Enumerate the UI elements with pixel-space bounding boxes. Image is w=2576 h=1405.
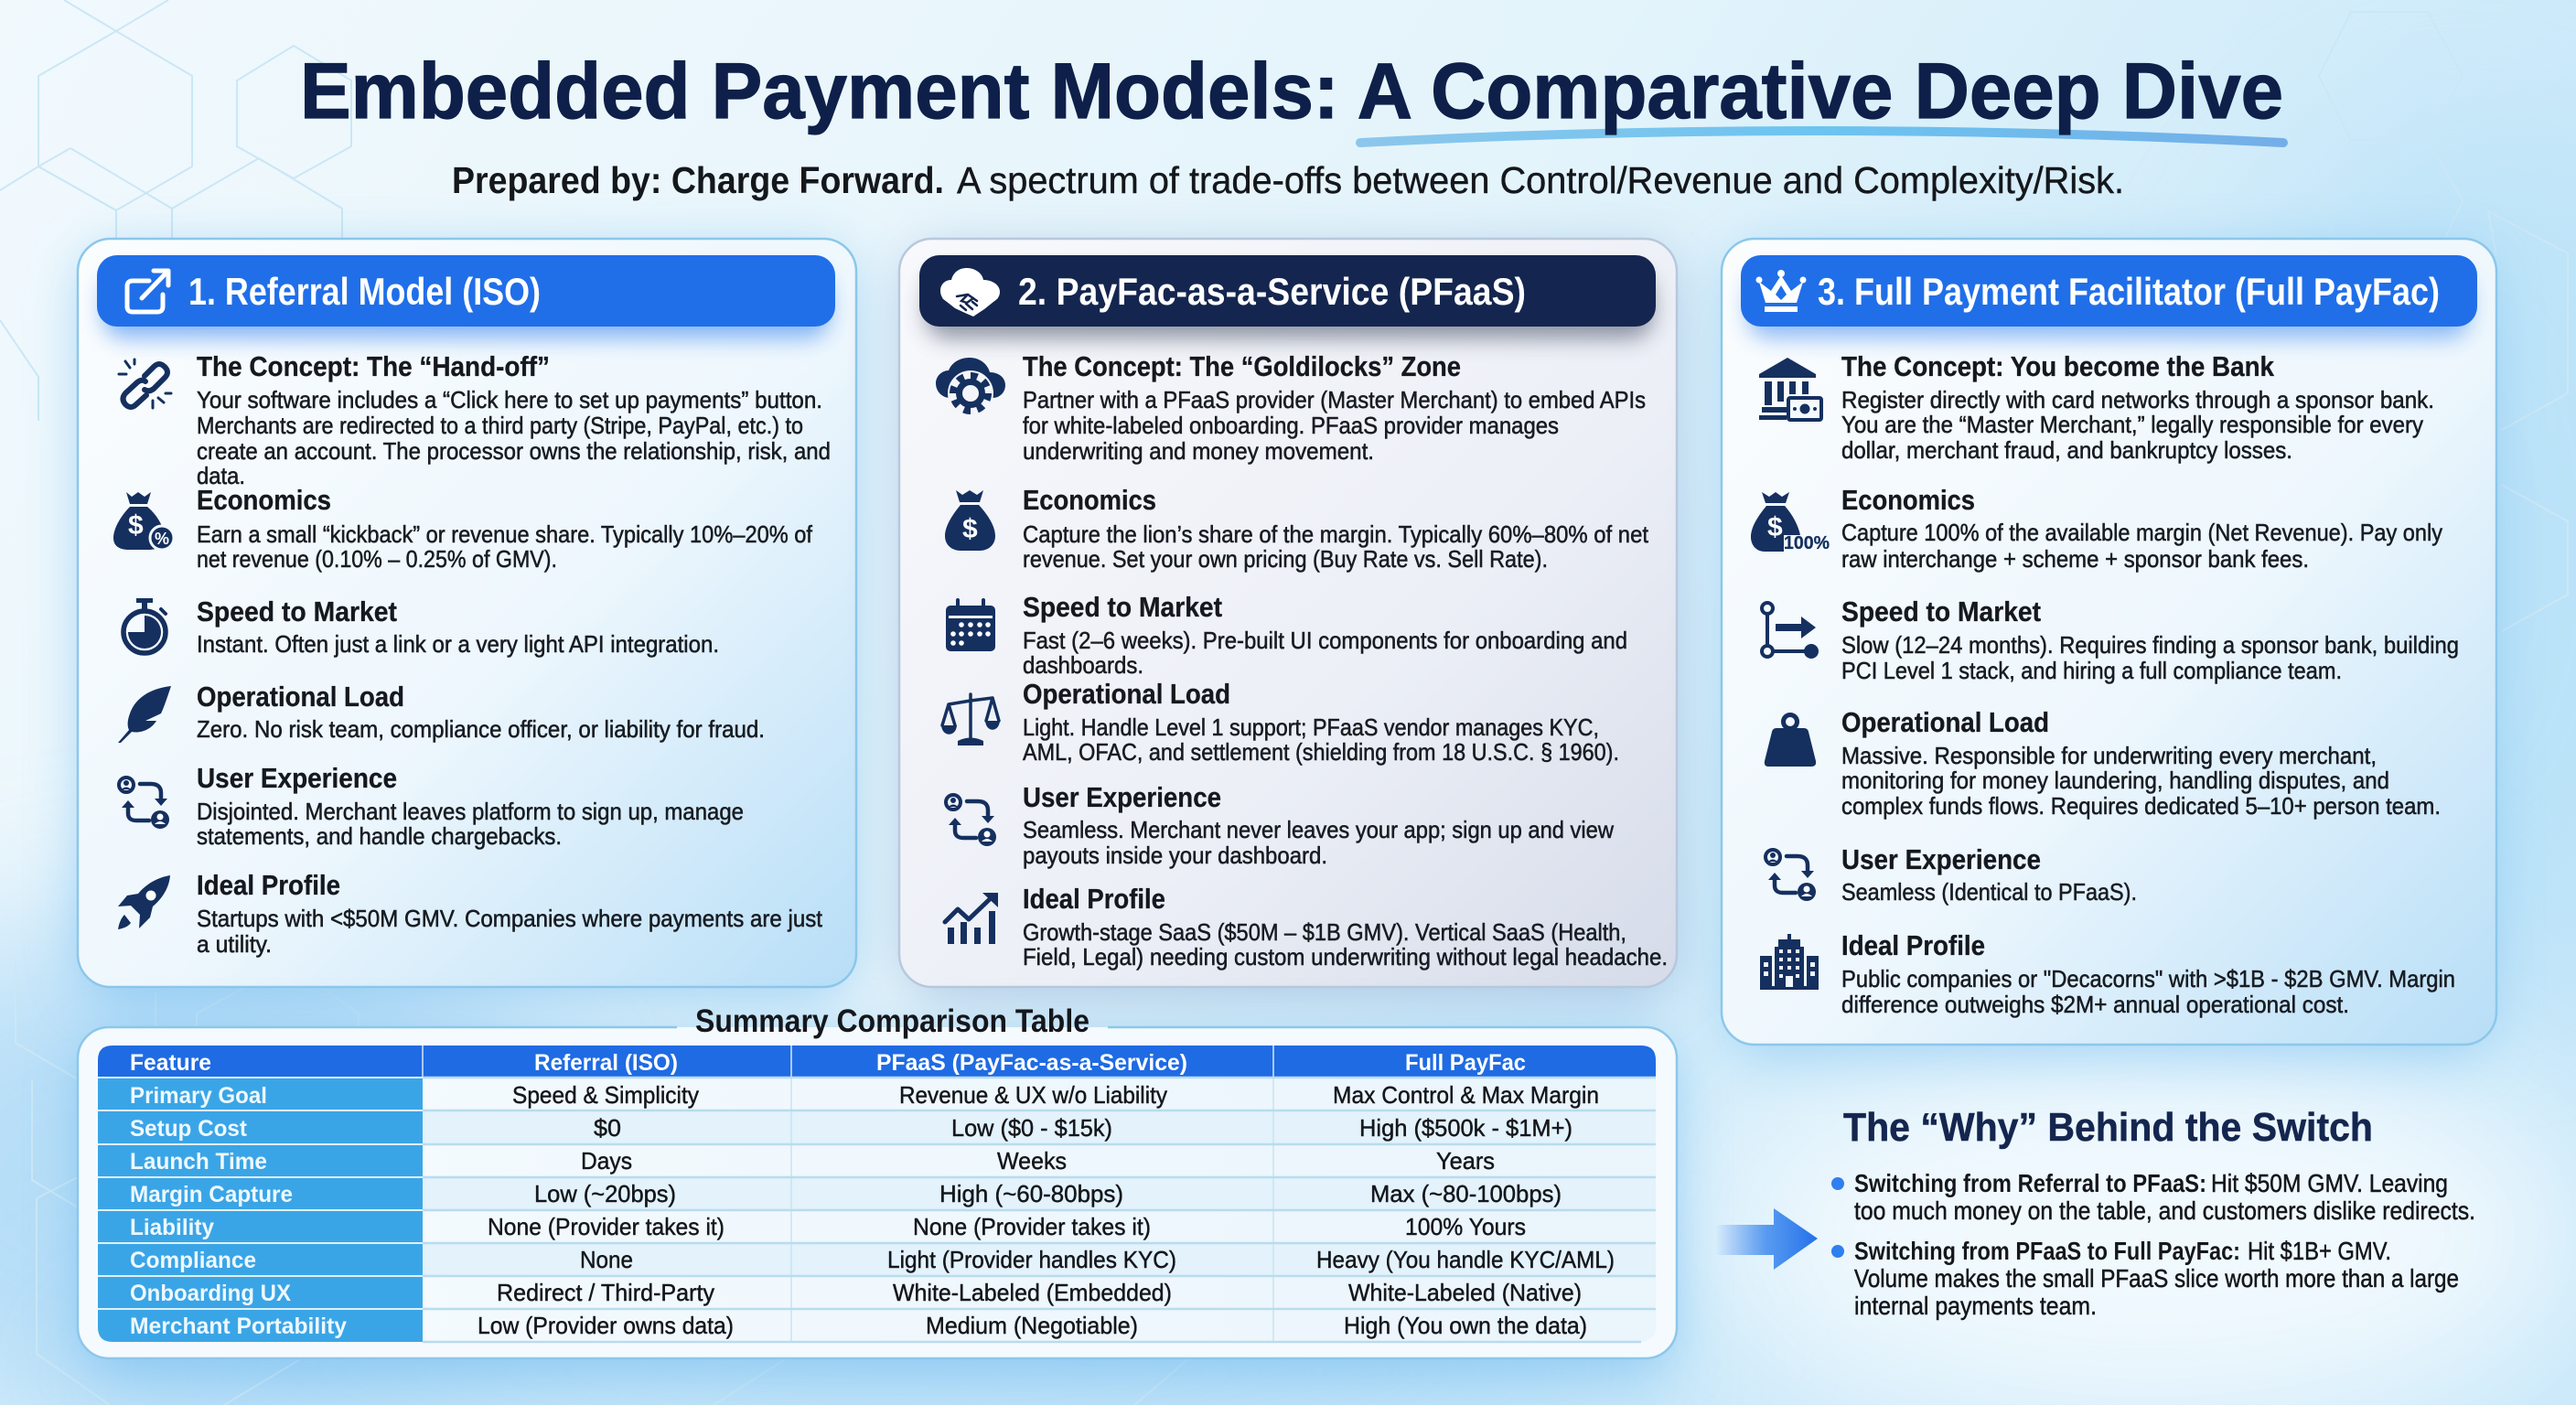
text: speed: Speed to Market <box>197 595 397 627</box>
row: merchant portability: Low (Provider owns data) <box>478 1312 734 1339</box>
text: concept <box>1023 350 1646 465</box>
text: speed: Speed to Market <box>1841 595 2041 627</box>
row: onboarding ux <box>130 1279 1582 1306</box>
icon: growth chart <box>945 893 998 944</box>
icon: external link <box>127 271 168 312</box>
text: operational <box>1841 706 2441 820</box>
bullet: pfaas to full payfac: Hit $1B+ GMV. <box>2248 1237 2391 1265</box>
bullet: referral to pfaas <box>1831 1169 2475 1225</box>
row: launch time: Launch Time <box>130 1149 267 1174</box>
icon: user swap <box>946 795 996 846</box>
text: speed: Speed to Market <box>1023 591 1222 623</box>
text: ideal profile: difference outweighs $2M+ annual operational cost. <box>1841 991 2349 1018</box>
text: user experience: statements, and handle chargebacks. <box>197 822 562 850</box>
text: ideal profile <box>197 869 823 958</box>
row: primary goal: Speed & Simplicity <box>512 1081 699 1109</box>
row: primary goal: Primary Goal <box>130 1083 267 1109</box>
row: compliance: None <box>580 1246 633 1273</box>
text: concept: data. <box>197 462 245 489</box>
text: ideal profile <box>1841 929 2455 1018</box>
text: speed: Slow (12–24 months). Requires finding a sponsor bank, building <box>1841 631 2459 659</box>
text: user experience: User Experience <box>1023 781 1221 813</box>
row: setup cost <box>130 1114 1572 1142</box>
icon: cloud handshake <box>940 268 1000 316</box>
row: onboarding ux: Onboarding UX <box>130 1281 291 1306</box>
row: onboarding ux: Redirect / Third-Party <box>497 1279 714 1306</box>
table header row: PFaaS (PayFac-as-a-Service) <box>876 1050 1187 1076</box>
icon: rocket <box>118 875 170 929</box>
row: liability: None (Provider takes it) <box>488 1213 724 1240</box>
text: user experience: payouts inside your dashboard. <box>1023 842 1327 869</box>
icon: bank <box>1759 358 1821 420</box>
text: ideal profile: Startups with <$50M GMV. Companies where payments are just <box>197 905 823 932</box>
row: margin capture: Margin Capture <box>130 1182 293 1207</box>
text: concept: dollar, merchant fraud, and bankruptcy losses. <box>1841 436 2292 464</box>
row: margin capture <box>130 1180 1562 1207</box>
bullet: referral to pfaas: Switching from Referral to PFaaS: <box>1854 1169 2206 1197</box>
icon: money bag 100 percent <box>1751 492 1830 553</box>
panel: summary comparison table <box>78 1003 1677 1372</box>
text: user experience: User Experience <box>197 762 397 794</box>
icon: money bag: $ <box>962 514 978 544</box>
bullet: pfaas to full payfac <box>1831 1237 2459 1320</box>
row: onboarding ux: White-Labeled (Native) <box>1348 1279 1582 1306</box>
text: speed <box>1023 591 1627 679</box>
text: economics <box>1841 484 2442 573</box>
row: setup cost: High ($500k - $1M+) <box>1359 1114 1572 1142</box>
icon: broken link <box>119 359 171 408</box>
text: operational: Operational Load <box>1841 706 2049 738</box>
icon: weight <box>1765 715 1816 767</box>
text: ideal profile: Public companies or "Decacorns" with >$1B - $2B GMV. Margin <box>1841 965 2455 992</box>
icon: money bag percent: $ <box>128 510 144 541</box>
section: why behind the switch <box>1831 1105 2475 1320</box>
table header row: Full PayFac <box>1405 1050 1526 1076</box>
text: economics: Earn a small “kickback” or revenue share. Typically 10%–20% of <box>197 520 813 548</box>
text: speed: dashboards. <box>1023 651 1143 679</box>
text: concept: Partner with a PFaaS provider (Master Merchant) to embed APIs <box>1023 386 1646 413</box>
row: margin capture: Max (~80-100bps) <box>1370 1180 1562 1207</box>
text: concept: for white-labeled onboarding. PFaaS provider manages <box>1023 412 1559 439</box>
table heading: Summary Comparison Table <box>695 1003 1089 1039</box>
row: merchant portability: Merchant Portability <box>130 1314 347 1339</box>
row: launch time: Years <box>1436 1147 1495 1174</box>
row: margin capture: High (~60-80bps) <box>939 1180 1123 1207</box>
row: margin capture: Low (~20bps) <box>534 1180 676 1207</box>
icon: money bag percent <box>113 492 174 550</box>
row: liability: None (Provider takes it) <box>913 1213 1151 1240</box>
panel header: 2. PayFac-as-a-Service (PFaaS) <box>1018 270 1526 313</box>
text: concept <box>1841 350 2434 464</box>
panel header <box>1741 255 2477 327</box>
bullet: referral to pfaas: Hit $50M GMV. Leaving <box>2211 1169 2448 1197</box>
text: ideal profile: Field, Legal) needing custom underwriting without legal headache. <box>1023 943 1668 971</box>
text: ideal profile <box>1023 883 1668 971</box>
row: liability: 100% Yours <box>1405 1213 1526 1240</box>
icon: user swap <box>119 778 169 829</box>
text: concept: The Concept: The “Hand-off” <box>197 350 550 382</box>
panel header: 1. Referral Model (ISO) <box>188 270 541 313</box>
row: merchant portability: High (You own the data) <box>1344 1312 1587 1339</box>
panel: 2. PayFac-as-a-Service <box>899 239 1677 997</box>
text: economics <box>197 484 813 573</box>
row: launch time <box>130 1147 1495 1174</box>
icon: money bag 100 percent: $ <box>1767 512 1783 542</box>
text: economics: Economics <box>1023 484 1156 516</box>
text: operational: monitoring for money laundering, handling disputes, and <box>1841 767 2389 794</box>
text: operational: Operational Load <box>197 681 404 713</box>
text: speed: PCI Level 1 stack, and hiring a full compliance team. <box>1841 657 2342 684</box>
icon: long path <box>1762 603 1819 659</box>
icon: user swap <box>1766 850 1816 901</box>
subtitle <box>452 159 2124 201</box>
icon: money bag <box>945 490 995 551</box>
comparison table <box>98 1046 1656 1342</box>
icon: money bag 100 percent: 100% <box>1784 533 1830 553</box>
text: ideal profile: Ideal Profile <box>197 869 340 901</box>
text: concept: You are the “Master Merchant,” legally responsible for every <box>1841 411 2423 438</box>
text: ideal profile: Growth-stage SaaS ($50M – $1B GMV). Vertical SaaS (Health, <box>1023 918 1626 946</box>
text: economics: Economics <box>197 484 331 516</box>
icon: calendar <box>946 600 995 651</box>
text: operational <box>1023 678 1619 766</box>
row: compliance: Heavy (You handle KYC/AML) <box>1316 1246 1615 1273</box>
title underline <box>1360 131 2283 143</box>
text: economics: Capture 100% of the available margin (Net Revenue). Pay only <box>1841 519 2442 546</box>
panel header: 3. Full Payment Facilitator (Full PayFac) <box>1818 270 2440 313</box>
bullet: pfaas to full payfac: internal payments team. <box>1854 1292 2097 1320</box>
text: concept: The Concept: You become the Bank <box>1841 350 2275 382</box>
text: operational: Light. Handle Level 1 support; PFaaS vendor manages KYC, <box>1023 713 1599 741</box>
text: speed: Instant. Often just a link or a very light API integration. <box>197 630 719 658</box>
text: speed: Fast (2–6 weeks). Pre-built UI components for onboarding and <box>1023 627 1627 654</box>
text: operational: AML, OFAC, and settlement (shielding from 18 U.S.C. § 1960). <box>1023 738 1619 766</box>
text: operational: Massive. Responsible for underwriting every merchant, <box>1841 742 2377 769</box>
row: setup cost: Setup Cost <box>130 1116 248 1142</box>
title: Embedded Payment Models: A Comparative Deep Dive <box>300 48 2283 135</box>
panel header <box>97 255 835 327</box>
text: operational <box>197 681 765 743</box>
text: concept: Register directly with card networks through a sponsor bank. <box>1841 386 2434 413</box>
icon: crown <box>1756 270 1806 312</box>
row: compliance: Light (Provider handles KYC) <box>887 1246 1176 1273</box>
text: economics: Economics <box>1841 484 1975 516</box>
text: ideal profile: Ideal Profile <box>1841 929 1985 961</box>
text: economics: net revenue (0.10% – 0.25% of GMV). <box>197 545 557 573</box>
text: economics: raw interchange + scheme + sponsor bank fees. <box>1841 545 2309 573</box>
bullet: pfaas to full payfac: Volume makes the small PFaaS slice worth more than a large <box>1854 1264 2459 1292</box>
arrow: switch <box>1715 1208 1818 1270</box>
row: liability: Liability <box>130 1215 214 1240</box>
icon: stopwatch <box>123 598 166 653</box>
text: concept: Your software includes a “Click here to set up payments” button. <box>197 386 822 413</box>
text: concept: create an account. The processor owns the relationship, risk, and <box>197 437 831 465</box>
text: user experience: Seamless. Merchant never leaves your app; sign up and view <box>1023 816 1614 843</box>
icon: office buildings <box>1760 934 1819 990</box>
subtitle: Prepared by: Charge Forward. <box>452 159 944 201</box>
table header row <box>130 1050 1526 1076</box>
text: concept: underwriting and money movement. <box>1023 437 1374 465</box>
panel header <box>919 255 1656 327</box>
table header row: Referral (ISO) <box>534 1050 678 1076</box>
row: setup cost: Low ($0 - $15k) <box>951 1114 1112 1142</box>
row: primary goal <box>130 1081 1599 1109</box>
bullet: referral to pfaas: too much money on the table, and customers dislike redirects. <box>1854 1196 2475 1225</box>
text: economics: Capture the lion’s share of the margin. Typically 60%–80% of net <box>1023 520 1649 548</box>
row: launch time: Days <box>581 1147 632 1174</box>
row: primary goal: Revenue & UX w/o Liability <box>899 1081 1167 1109</box>
icon: money bag percent: % <box>155 530 169 548</box>
row: compliance <box>130 1246 1615 1273</box>
row: setup cost: $0 <box>594 1114 621 1142</box>
panel: 1. Referral Model (ISO) <box>78 239 856 997</box>
icon: feather <box>118 686 171 743</box>
text: operational: Zero. No risk team, compliance officer, or liability for fraud. <box>197 715 765 743</box>
row: onboarding ux: White-Labeled (Embedded) <box>893 1279 1172 1306</box>
text: user experience <box>1841 843 2137 906</box>
text: ideal profile: a utility. <box>197 930 272 958</box>
text: economics <box>1023 484 1649 573</box>
table header row: Feature <box>130 1050 211 1076</box>
heading: The “Why” Behind the Switch <box>1843 1105 2373 1150</box>
text: user experience: User Experience <box>1841 843 2041 875</box>
row: launch time: Weeks <box>997 1147 1067 1174</box>
text: concept <box>197 350 831 489</box>
text: user experience: Seamless (Identical to PFaaS). <box>1841 878 2137 906</box>
row: merchant portability <box>130 1312 1587 1339</box>
icon: cloud gear <box>936 358 1005 416</box>
subtitle: A spectrum of trade-offs between Control/Revenue and Complexity/Risk. <box>957 159 2124 201</box>
bullet: pfaas to full payfac: Switching from PFaaS to Full PayFac: <box>1854 1237 2240 1265</box>
icon: scales <box>941 694 1000 745</box>
row: compliance: Compliance <box>130 1248 256 1273</box>
text: ideal profile: Ideal Profile <box>1023 883 1165 915</box>
text: user experience: Disjointed. Merchant leaves platform to sign up, manage <box>197 798 744 825</box>
row: liability <box>130 1213 1526 1240</box>
text: user experience <box>1023 781 1614 869</box>
text: operational: Operational Load <box>1023 678 1230 710</box>
text: concept: The Concept: The “Goldilocks” Zone <box>1023 350 1461 382</box>
text: speed <box>1841 595 2459 684</box>
row: primary goal: Max Control & Max Margin <box>1333 1081 1599 1109</box>
text: concept: Merchants are redirected to a third party (Stripe, PayPal, etc.) to <box>197 412 803 439</box>
text: operational: complex funds flows. Requires dedicated 5–10+ person team. <box>1841 792 2441 820</box>
row: merchant portability: Medium (Negotiable) <box>926 1312 1138 1339</box>
text: economics: revenue. Set your own pricing (Buy Rate vs. Sell Rate). <box>1023 545 1548 573</box>
text: speed <box>197 595 719 658</box>
text: user experience <box>197 762 744 850</box>
panel: 3. Full Payment Facilitator <box>1722 239 2496 1056</box>
